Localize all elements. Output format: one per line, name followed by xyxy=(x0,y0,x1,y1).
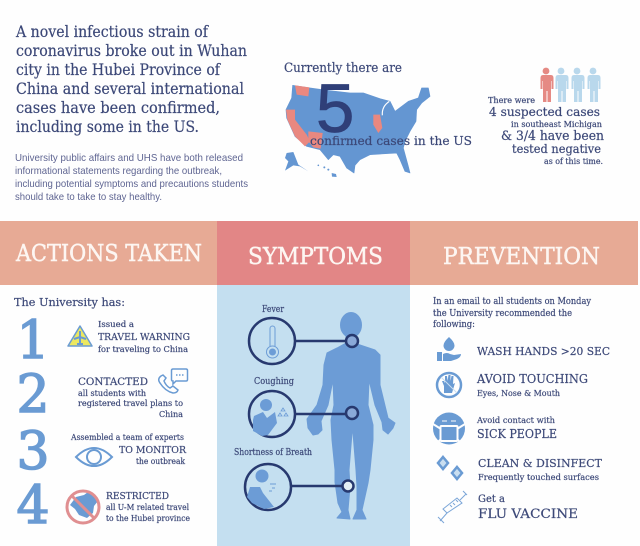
intro heading: city in the Hubei Province of xyxy=(16,61,221,79)
confirmed label: confirmed cases in the US xyxy=(310,133,472,148)
item: avoid touching: AVOID TOUCHING xyxy=(476,372,588,386)
body figure xyxy=(307,312,395,519)
intro heading: cases have been confirmed, xyxy=(16,99,220,117)
step 3: TO MONITOR xyxy=(119,445,187,456)
item: avoid touching: Eyes, Nose & Mouth xyxy=(477,389,560,399)
symptom: coughing xyxy=(249,377,358,437)
step 2: CONTACTED xyxy=(78,376,148,388)
item: clean and disinfect: Frequently touched surfaces xyxy=(478,473,599,483)
step 3: 3 xyxy=(16,422,50,482)
panel: symptoms xyxy=(217,285,410,546)
intro heading: including some in the US. xyxy=(16,118,199,136)
header band: symptoms xyxy=(217,221,410,285)
step 4: RESTRICTED xyxy=(106,491,169,502)
intro paragraph xyxy=(15,152,248,203)
suspected text: in southeast Michigan xyxy=(511,120,602,129)
step 1 xyxy=(16,311,190,371)
step 4: to the Hubei province xyxy=(106,514,190,523)
university label: The University has: xyxy=(14,296,125,309)
step 2: China xyxy=(159,410,183,419)
item: flu vaccine: Get a xyxy=(478,494,505,505)
map of the US xyxy=(285,85,430,177)
item: clean and disinfect xyxy=(438,456,602,483)
suspected text: There were xyxy=(488,96,535,106)
step 1: for traveling to China xyxy=(98,345,188,354)
icon: people xyxy=(540,68,600,102)
item: sick people xyxy=(433,412,557,445)
step 4: all U-M related travel xyxy=(106,503,189,512)
symptom: shortness of breath xyxy=(234,448,354,510)
step 1: 1 xyxy=(16,311,50,371)
item: sick people: SICK PEOPLE xyxy=(477,427,557,441)
intro paragraph: including potential symptoms and precautions students xyxy=(15,178,248,190)
item: wash hands: WASH HANDS >20 SEC xyxy=(477,344,610,358)
panel: actions taken xyxy=(14,296,190,536)
suspected text: & 3/4 have been xyxy=(501,129,605,144)
step 3: Assembled a team of experts xyxy=(70,433,184,442)
intro paragraph: informational statements regarding the outbreak, xyxy=(15,165,222,177)
big number 5: 5 xyxy=(316,70,354,147)
item: flu vaccine: FLU VACCINE xyxy=(478,507,578,522)
header band: symptoms: SYMPTOMS xyxy=(248,244,383,270)
item: avoid touching xyxy=(437,372,588,399)
symptom: fever xyxy=(249,305,358,364)
prevention intro: the University recommended the xyxy=(433,309,572,319)
prevention intro: following: xyxy=(433,320,475,330)
prevention intro xyxy=(433,297,592,330)
step 4 xyxy=(16,476,190,536)
step 2: 2 xyxy=(16,365,50,425)
step 3: the outbreak xyxy=(136,457,185,466)
header band: actions taken xyxy=(0,221,217,285)
panel: prevention xyxy=(433,297,610,523)
currently label: Currently there are xyxy=(284,61,402,76)
step 4: 4 xyxy=(16,476,50,536)
suspected text: as of this time. xyxy=(544,157,603,166)
item: wash hands xyxy=(437,337,610,361)
header band: prevention xyxy=(410,221,638,285)
step 2 xyxy=(16,365,188,425)
suspected text: 4 suspected cases xyxy=(489,105,600,119)
step 1: TRAVEL WARNING xyxy=(98,332,190,343)
intro paragraph: should take to take to stay healthy. xyxy=(15,191,162,203)
header band: actions taken: ACTIONS TAKEN xyxy=(15,241,202,267)
header band: prevention: PREVENTION xyxy=(443,244,600,270)
US cases panel xyxy=(284,61,472,177)
intro heading: China and several international xyxy=(16,80,244,98)
suspected text xyxy=(488,96,605,166)
item: flu vaccine xyxy=(438,491,578,523)
intro heading xyxy=(15,23,247,136)
suspected cases panel xyxy=(488,68,605,166)
intro heading: A novel infectious strain of xyxy=(15,23,209,41)
step 2: registered travel plans to xyxy=(78,399,183,408)
symptom: coughing: Coughing xyxy=(254,377,294,387)
intro paragraph: University public affairs and UHS have both released xyxy=(15,152,243,164)
step 1: Issued a xyxy=(98,320,134,329)
step 3 xyxy=(16,422,187,482)
intro heading: coronavirus broke out in Wuhan xyxy=(16,42,247,60)
prevention intro: In an email to all students on Monday xyxy=(433,297,592,307)
symptom: shortness of breath: Shortness of Breath xyxy=(234,448,312,458)
step 2: all students with xyxy=(78,389,146,398)
suspected text: tested negative xyxy=(512,142,601,156)
symptom: fever: Fever xyxy=(262,305,285,315)
item: clean and disinfect: CLEAN & DISINFECT xyxy=(478,456,602,470)
item: sick people: Avoid contact with xyxy=(476,416,555,426)
